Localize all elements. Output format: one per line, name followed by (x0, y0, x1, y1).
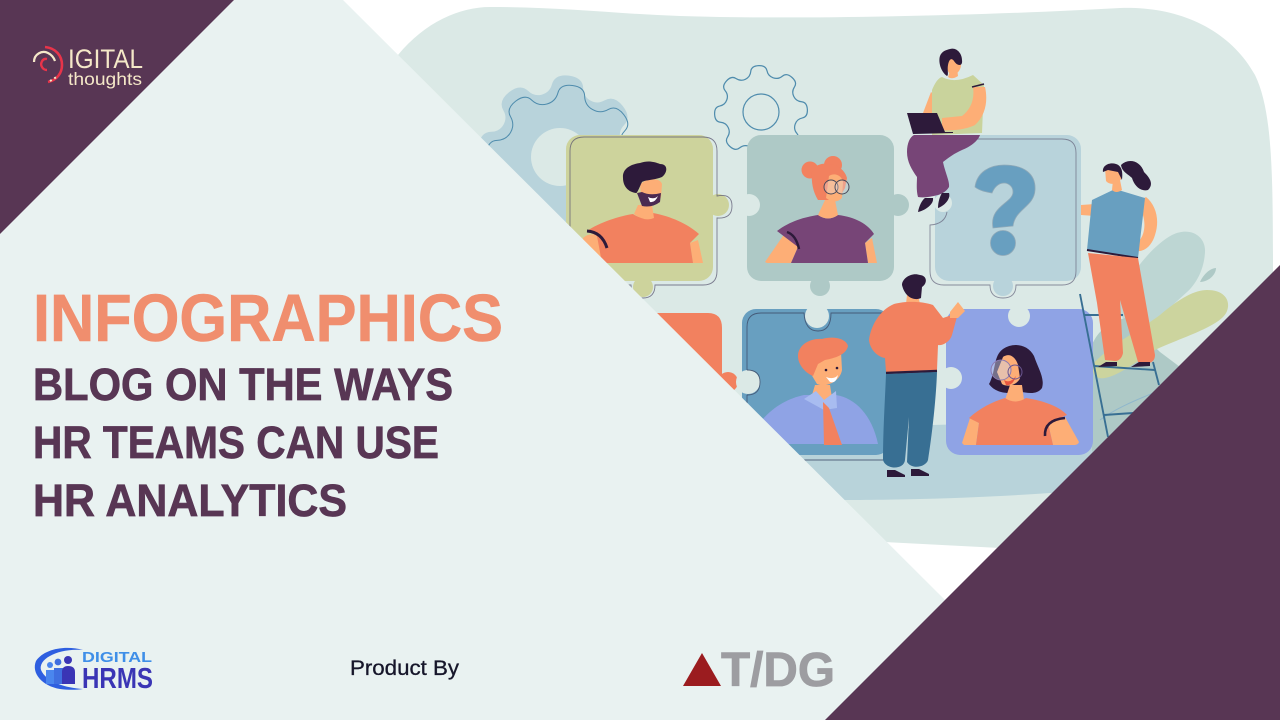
person: red-haired woman portrait (765, 156, 877, 263)
icon: large filled gear (471, 68, 649, 248)
logo: Digital Thoughts: IGITAL (68, 44, 143, 74)
icon: outlined gear (712, 63, 810, 161)
ladder (1080, 294, 1159, 437)
puzzle piece: question mark (930, 135, 1081, 298)
logo: Digital HRMS: DIGITAL (82, 650, 152, 666)
plant leaves (1092, 232, 1228, 452)
background blob (398, 7, 1273, 548)
ground band (780, 420, 1130, 500)
corner triangle: bottom right (825, 265, 1280, 720)
person: standing woman with ponytail (1081, 161, 1157, 367)
puzzle piece: blue with man in tie (736, 304, 890, 460)
person: woman in glasses portrait (962, 345, 1079, 445)
logo: Digital HRMS: HRMS (82, 663, 153, 695)
logo: TDG: T/DG (721, 644, 835, 697)
icon: laptop (907, 113, 953, 134)
subheading: blog title: BLOG ON THE WAYS (33, 359, 453, 410)
subheading: blog title: HR TEAMS CAN USE (33, 417, 439, 468)
icon: question mark (975, 165, 1035, 256)
person: woman sitting with laptop (907, 49, 986, 212)
person: man in orange sweater (869, 274, 965, 477)
subheading: blog title (33, 359, 453, 526)
subheading: blog title: HR ANALYTICS (33, 475, 347, 526)
text: product by: Product By (350, 657, 460, 680)
puzzle piece: orange (650, 313, 738, 400)
logo: Digital HRMS (35, 648, 153, 695)
puzzle piece: green with bearded man (566, 135, 732, 298)
person: bearded man portrait (583, 161, 703, 263)
puzzle piece: periwinkle with woman in glasses (940, 305, 1093, 455)
logo: Digital Thoughts (34, 44, 143, 89)
person: man with tie portrait (762, 338, 878, 445)
puzzle piece: teal with red-haired woman (738, 135, 909, 296)
logo: Digital Thoughts: thoughts (68, 69, 142, 89)
panel: light diagonal background (0, 0, 945, 720)
corner triangle: top left (0, 0, 234, 234)
heading: Infographics: INFOGRAPHICS (33, 281, 503, 356)
